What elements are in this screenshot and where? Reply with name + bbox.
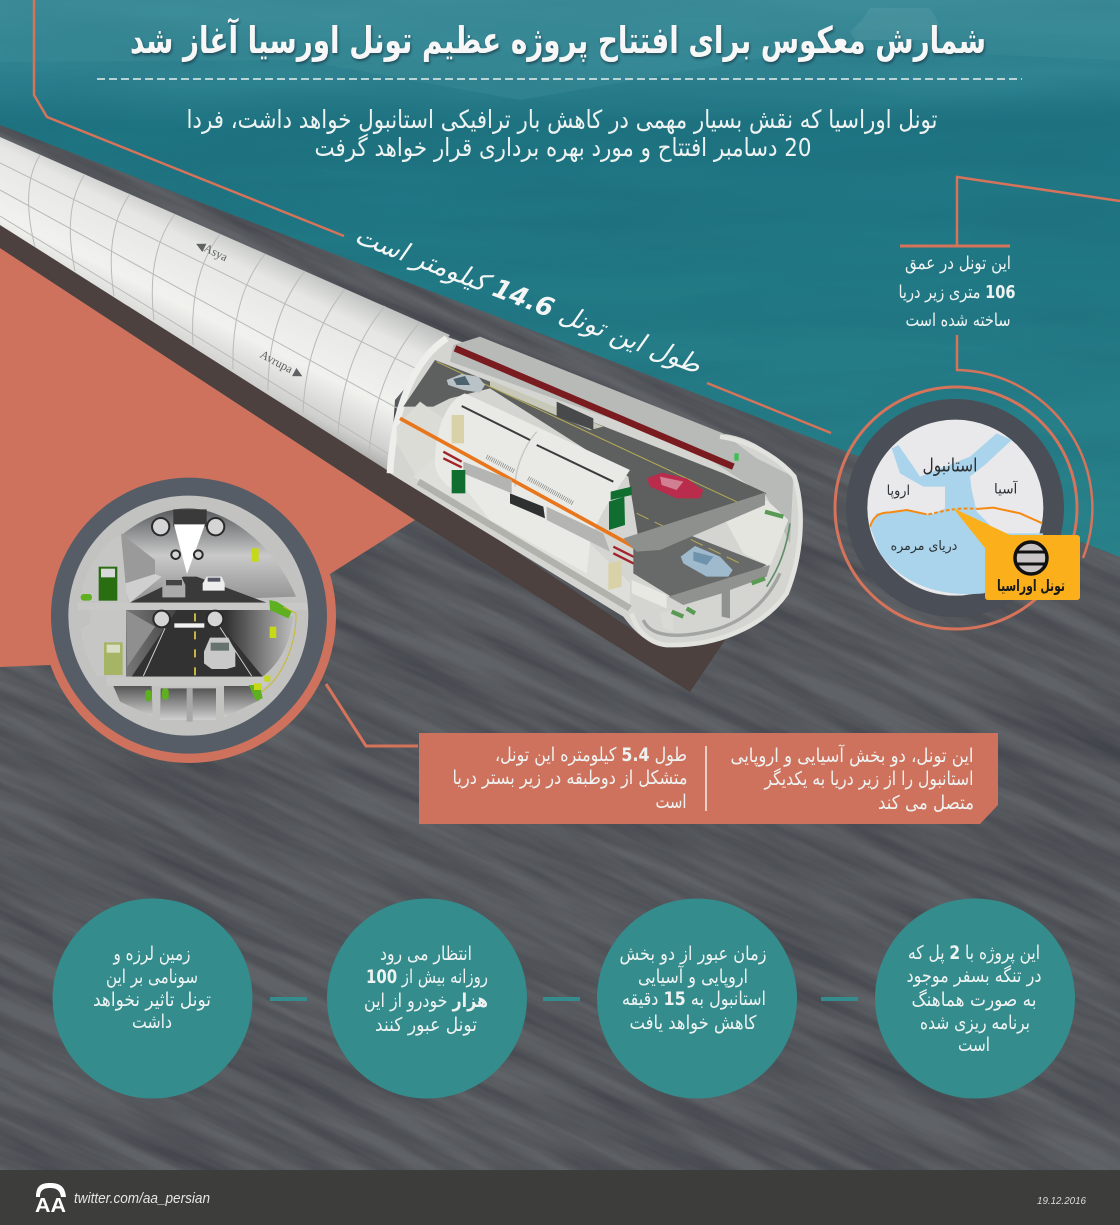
- info text right: این تونل، دو بخش آسیایی و اروپایی: [730, 743, 974, 767]
- info text right: [730, 743, 974, 814]
- ducts: [113, 686, 260, 720]
- central partition arches: [435, 393, 630, 573]
- upper road: [403, 360, 767, 538]
- tube marking: Asya: ◀Asya: [193, 237, 231, 264]
- info text left: متشکل از دوطبقه در زیر بستر دریا: [452, 767, 688, 789]
- road median: [490, 380, 603, 430]
- floor edge band: [418, 482, 630, 608]
- intro text: تونل اوراسیا که نقش بسیار مهمی در کاهش بار ترافیکی استانبول خواهد داشت، فردا: [186, 105, 938, 135]
- green pipes: [672, 512, 783, 617]
- info box: [419, 733, 998, 824]
- fact circle: crossing time: زمان عبور از دو بخش: [620, 943, 766, 965]
- map circle: [835, 387, 1080, 629]
- fact circle: daily vehicles: روزانه بیش از 100: [366, 966, 488, 988]
- info text right: متصل می کند: [878, 792, 974, 814]
- info text left: [452, 744, 688, 813]
- connector 3: [821, 997, 858, 1001]
- left room upper: [80, 534, 127, 603]
- lower banner: [174, 623, 204, 628]
- fact circle: bridges: در تنگه بسفر موجود: [906, 964, 1042, 987]
- info text left: است: [656, 791, 686, 813]
- connector: cross-section to text box: [326, 684, 418, 746]
- deck cross beam: [623, 493, 765, 552]
- fact circle: daily vehicles: انتظار می رود: [380, 943, 472, 965]
- car: silver: [447, 374, 485, 393]
- depth callout: ساخته شده است: [906, 310, 1010, 331]
- twitter handle: twitter.com/aa_persian: [74, 1190, 210, 1207]
- footer bar: [0, 1170, 1120, 1225]
- date: 19.12.2016: [1037, 1196, 1086, 1207]
- red rails under tray: [443, 452, 643, 568]
- fact circle: crossing time: کاهش خواهد یافت: [630, 1012, 757, 1034]
- fact circle: bridges: برنامه ریزی شده: [920, 1012, 1030, 1034]
- intro text: 20 دسامبر افتتاح و مورد بهره برداری قرار خواهد گرفت: [314, 133, 812, 163]
- tube rim: [390, 338, 447, 473]
- ship in background: [850, 8, 940, 40]
- left side block: [397, 402, 443, 477]
- map road line: [870, 508, 1042, 527]
- service gallery: [643, 573, 780, 635]
- rear wall: [450, 337, 793, 543]
- green pipes and lights: [81, 594, 292, 701]
- connector 2: [543, 997, 580, 1001]
- lower cross beam: [668, 565, 770, 618]
- map label: Europe: اروپا: [887, 483, 910, 499]
- fact circle: earthquake: [52, 898, 252, 1098]
- fact circle: bridges: این پروژه با 2 پل که: [908, 942, 1040, 964]
- title divider: [97, 78, 1022, 80]
- info text left: طول 5.4 کیلومتره این تونل،: [495, 744, 687, 766]
- background: sea: [0, 0, 1120, 560]
- fans upper: [152, 518, 224, 559]
- map land: [867, 420, 1043, 596]
- tube marking: Avrupa: Avrupa ▶: [258, 347, 307, 382]
- green cabinets: [452, 470, 632, 530]
- fact circle: bridges: به صورت هماهنگ: [912, 989, 1036, 1011]
- tunnel length text: طول این تونل 14.6 کیلومتر است: [351, 221, 705, 381]
- salmon panel behind cross-section: [0, 248, 415, 667]
- cross-section circle: [42, 469, 336, 763]
- upper side wall: [121, 533, 155, 584]
- car: red: [647, 473, 703, 498]
- tunnel cutaway interior: [390, 337, 801, 647]
- fact circle: crossing time: [597, 898, 797, 1098]
- red service rail: [455, 348, 733, 467]
- lower tube: [126, 610, 293, 677]
- depth callout: 106 متری زیر دریا: [898, 282, 1016, 303]
- map label: Marmara: دریای مرمره: [891, 539, 957, 554]
- fact circle: earthquake: زمین لرزه و: [113, 943, 190, 965]
- doors: [452, 415, 622, 590]
- shell end ring: [632, 437, 801, 645]
- tunnel outer tube: [0, 137, 450, 472]
- right inner wall: [723, 500, 788, 567]
- fact circle: earthquake: سونامی بر این: [106, 966, 198, 988]
- lower car: [204, 638, 235, 669]
- fact circle: earthquake: داشت: [132, 1011, 172, 1033]
- fact circle: crossing time: استانبول به 15 دقیقه: [622, 988, 766, 1010]
- fact circle: crossing time: اروپایی و آسیایی: [638, 964, 748, 988]
- railings: [487, 457, 573, 503]
- mid slab: [77, 603, 307, 610]
- outer concrete shell: [390, 337, 801, 647]
- lower road: [132, 610, 263, 677]
- fans lower: [153, 611, 223, 627]
- icon: AA logo: [35, 1183, 66, 1217]
- upper road: [130, 577, 267, 603]
- fact circle: daily vehicles: [327, 898, 527, 1098]
- icon: AA logo: AA: [35, 1195, 66, 1217]
- lower slab: [107, 677, 267, 686]
- fact circle: bridges: [875, 898, 1075, 1098]
- fact circle: daily vehicles: تونل عبور کنند: [375, 1014, 477, 1036]
- map label: Asia: آسیا: [994, 480, 1018, 497]
- olive door: [104, 642, 123, 675]
- centre line: [437, 362, 740, 503]
- info text right: استانبول را از زیر دریا به یکدیگر: [764, 767, 974, 790]
- depth callout: این تونل در عمق: [905, 253, 1011, 274]
- fact circle: earthquake: تونل تاثیر نخواهد: [93, 989, 211, 1011]
- depth callout: [898, 177, 1120, 558]
- fact circle: bridges: است: [958, 1034, 990, 1056]
- green door upper: [99, 567, 117, 601]
- upper cars: [162, 577, 185, 597]
- connector: tunnel length callout lower: [707, 383, 831, 433]
- lower road: [633, 530, 767, 600]
- map sea: [870, 433, 1043, 594]
- connector 1: [270, 997, 307, 1001]
- tunnel label box: [953, 508, 1080, 600]
- fact circle: daily vehicles: هزار خودرو از این: [364, 990, 488, 1012]
- tunnel label box: تونل اوراسیا: [997, 576, 1065, 595]
- map tunnel dashed: [928, 509, 977, 514]
- upper tube: [122, 508, 296, 603]
- lower left wall: [126, 610, 155, 667]
- map label: Istanbul: استانبول: [922, 455, 977, 476]
- walkway beams: [463, 462, 512, 493]
- intro text: [186, 105, 938, 163]
- lower floor: [413, 457, 630, 612]
- orange cable tray: [400, 418, 637, 548]
- connector: tunnel length callout upper: [34, 0, 344, 236]
- rock band under tunnel: [0, 225, 725, 692]
- car: blue: [681, 546, 733, 577]
